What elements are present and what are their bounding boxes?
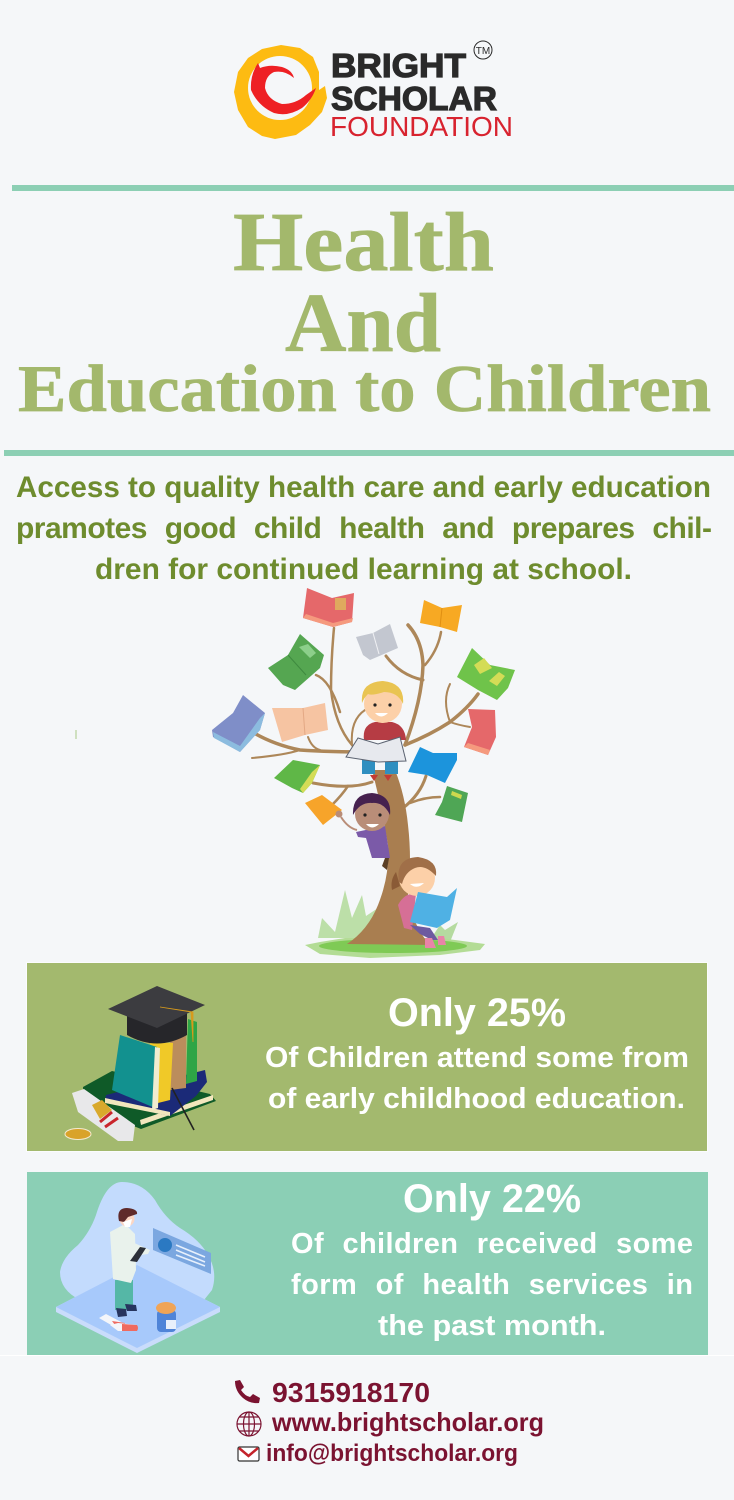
icon: graduation cap, books and diploma [65, 986, 216, 1141]
trunk [347, 770, 430, 945]
contact: email: info@brightscholar.org [266, 1440, 518, 1467]
speck [75, 730, 77, 739]
title: Health [233, 196, 494, 289]
contact: phone: 9315918170 [272, 1377, 430, 1408]
book: green lower right [435, 786, 468, 822]
wordmark: SCHOLAR: SCHOLAR [331, 80, 497, 117]
icon: doctor with tablet, pills and bottle [56, 1182, 220, 1353]
stat heading: only 25%: Only 25% [388, 991, 566, 1035]
title: And [285, 277, 441, 370]
stat text: of early childhood education. [268, 1083, 685, 1115]
book: peach [272, 703, 328, 742]
icon: yellow and red swirl [234, 45, 327, 139]
intro paragraph [16, 471, 712, 586]
panel: early childhood education [26, 962, 708, 1152]
child: boy peeking from trunk [336, 793, 390, 870]
stat text: the past month. [378, 1310, 606, 1342]
book: purple [212, 695, 265, 752]
book: orange low [305, 795, 342, 825]
stat text: form of health services in [291, 1269, 693, 1301]
stat text: Of Children attend some from [265, 1042, 689, 1074]
book: light green low [274, 760, 320, 793]
book: orange [420, 600, 462, 632]
child: boy reading on branch [346, 681, 406, 781]
book: blue [408, 747, 457, 783]
trademark mark [474, 41, 492, 59]
book: grey [356, 624, 398, 660]
stat heading: only 22%: Only 22% [403, 1177, 581, 1221]
child: girl reading with blue book [392, 857, 457, 948]
intro paragraph: dren for continued learning at school. [95, 553, 632, 586]
wordmark: FOUNDATION: FOUNDATION [330, 111, 513, 142]
intro paragraph: Access to quality health care and early education [16, 471, 711, 504]
branches [252, 625, 478, 808]
contact details [235, 1377, 544, 1467]
intro paragraph: pramotes good child health and prepares chil- [16, 512, 712, 545]
illustration: book tree with children [75, 588, 515, 958]
book: red top [303, 588, 354, 627]
stat text [265, 1042, 689, 1115]
logo [234, 41, 513, 142]
grass [305, 890, 485, 958]
book: red right [464, 709, 496, 755]
panel: health services [27, 1172, 708, 1355]
book: green left [268, 634, 324, 690]
title: Education to Children [18, 352, 711, 426]
title [18, 196, 711, 426]
trademark mark: TM [476, 46, 490, 57]
book: light green right [457, 648, 515, 700]
stat text [291, 1228, 693, 1342]
contact: website: www.brightscholar.org [271, 1407, 544, 1437]
stat text: Of children received some [291, 1228, 693, 1260]
wordmark: BRIGHT: BRIGHT [331, 47, 466, 84]
